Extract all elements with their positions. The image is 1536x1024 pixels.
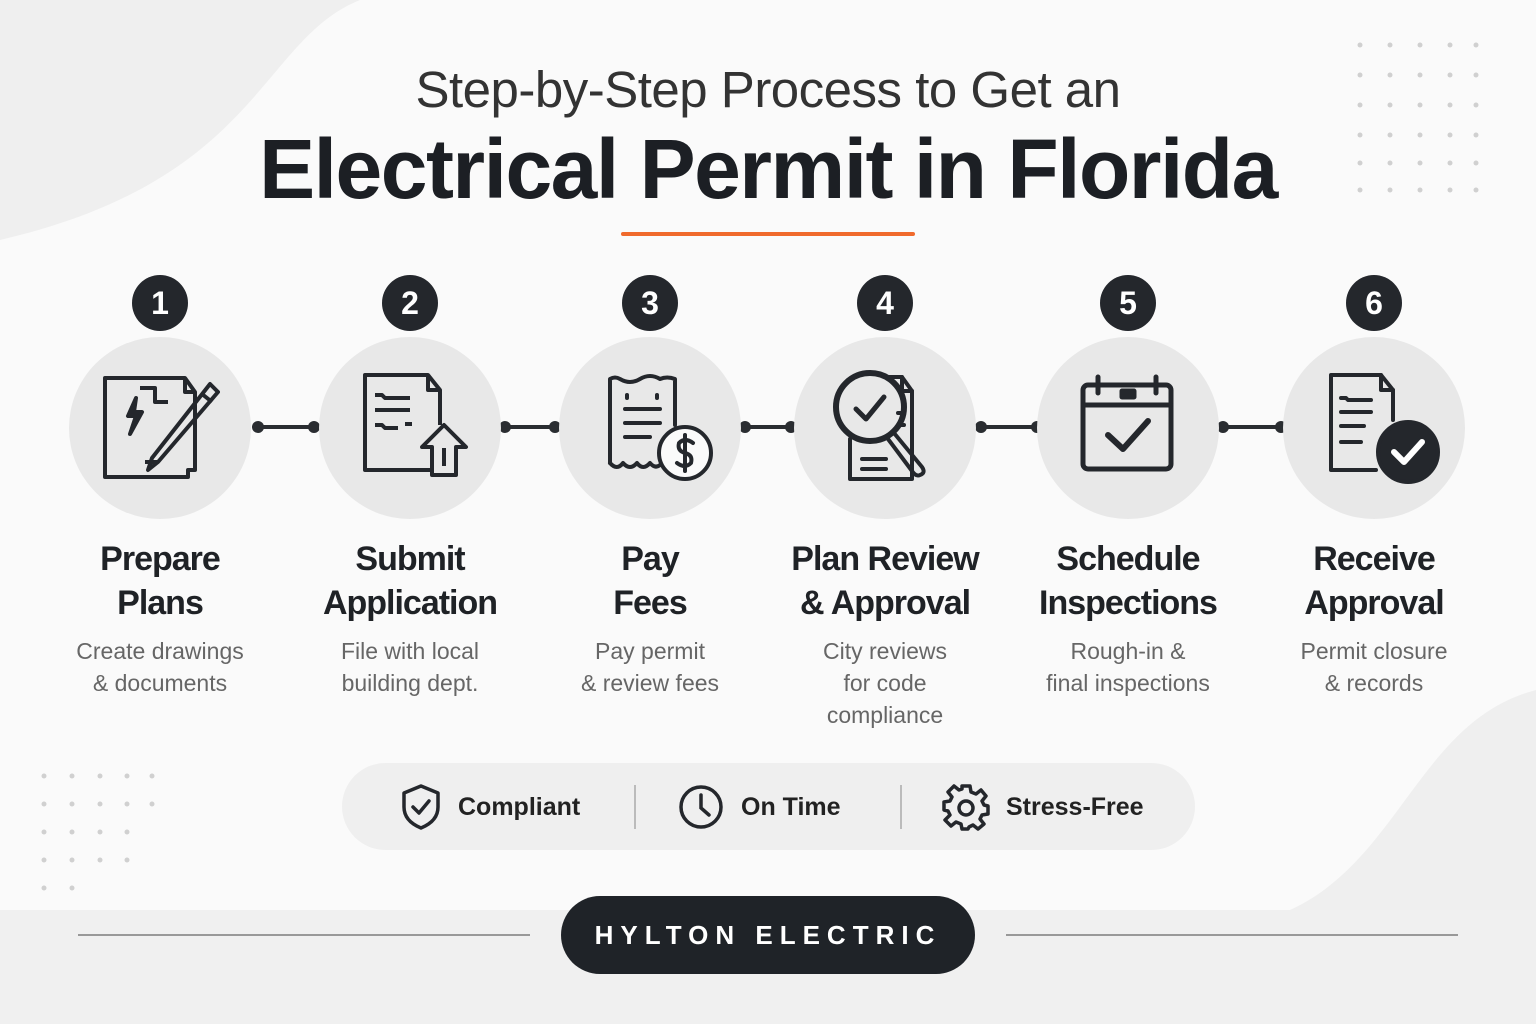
badge: compliant: Compliant — [458, 792, 580, 820]
step 5: Rough-in & — [1070, 638, 1186, 664]
step 5: Inspections — [1039, 584, 1217, 622]
step 6: 6 — [1365, 285, 1383, 321]
step 6: Approval — [1304, 584, 1444, 622]
accent underline — [621, 232, 915, 236]
step 2: File with local — [341, 638, 479, 664]
step 3: Pay permit — [595, 638, 705, 664]
step 3: 3 — [641, 285, 659, 321]
step 4: Plan Review — [791, 540, 979, 578]
step 5: 5 — [1119, 285, 1137, 321]
connectors — [258, 425, 314, 429]
brand button: HYLTON ELECTRIC — [595, 920, 941, 950]
step 2 — [319, 275, 501, 696]
step 1: 1 — [151, 285, 169, 321]
step 3: & review fees — [581, 670, 719, 696]
step 4: compliance — [827, 702, 943, 728]
footer lines — [78, 934, 530, 936]
icon: approved document — [1329, 373, 1440, 484]
step 5: final inspections — [1046, 670, 1210, 696]
step 2: building dept. — [342, 670, 478, 696]
step 2: Application — [323, 584, 497, 622]
step 2: 2 — [401, 285, 419, 321]
step 6: & records — [1325, 670, 1423, 696]
step 4: for code — [843, 670, 927, 696]
step 4 — [791, 275, 980, 728]
icon: plans with pencil — [103, 376, 220, 479]
step 6: Permit closure — [1300, 638, 1447, 664]
step 3: Pay — [621, 540, 679, 578]
title — [259, 61, 1279, 216]
step 6: Receive — [1313, 540, 1435, 578]
step 5: Schedule — [1056, 540, 1200, 578]
icon: receipt with dollar — [608, 374, 713, 481]
step 4: 4 — [876, 285, 894, 321]
icon: document upload — [363, 373, 468, 477]
title: Step-by-Step Process to Get an — [415, 61, 1121, 118]
badge: stress-free: Stress-Free — [1006, 792, 1144, 820]
badge: compliant — [402, 784, 580, 830]
step title + desc: Create drawings — [76, 638, 244, 664]
step title + desc: & documents — [93, 670, 227, 696]
step title + desc: Prepare — [100, 540, 220, 578]
step title + desc: Plans — [117, 584, 203, 622]
step 4: City reviews — [823, 638, 947, 664]
benefits bar — [342, 763, 1195, 850]
icon: magnifier review — [833, 370, 926, 481]
title: Electrical Permit in Florida — [259, 122, 1277, 216]
step 3: Fees — [613, 584, 687, 622]
step 1 — [69, 275, 251, 696]
step 3 — [559, 275, 741, 696]
icon: calendar check — [1080, 374, 1174, 472]
step 5 — [1037, 275, 1219, 696]
brand button — [561, 896, 975, 974]
step 2: Submit — [355, 540, 465, 578]
step title + desc — [76, 540, 244, 696]
badge: stress-free — [942, 784, 1144, 831]
badge: on time: On Time — [741, 792, 841, 820]
badge: on time — [679, 785, 841, 829]
step 4: & Approval — [800, 584, 970, 622]
step 6 — [1283, 275, 1465, 696]
